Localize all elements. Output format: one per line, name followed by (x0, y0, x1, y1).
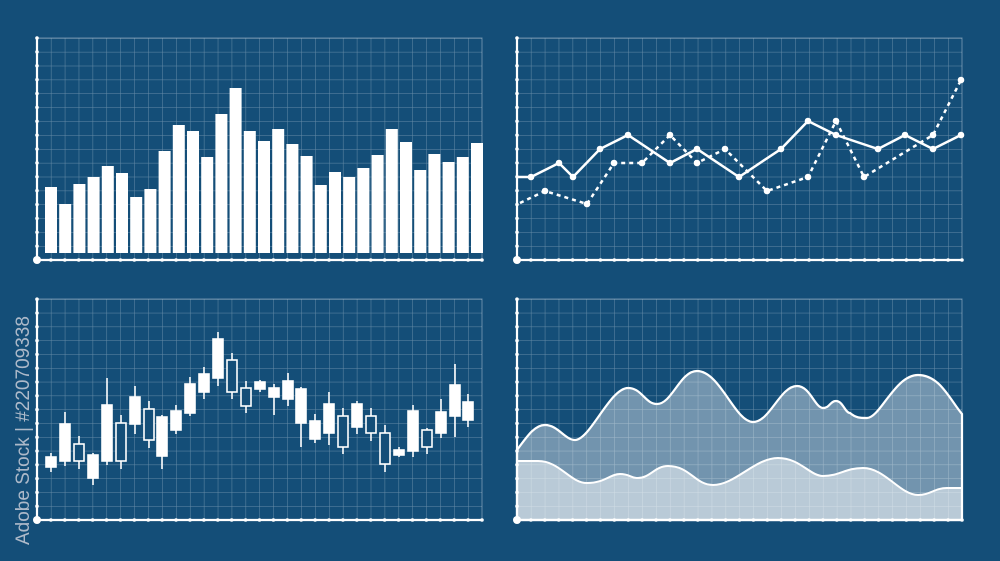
watermark id text: Adobe Stock | #220709338 (13, 316, 34, 545)
panel: bar chart (33, 37, 483, 264)
axes (37, 38, 482, 260)
panel: area chart (513, 298, 963, 524)
dotted line series (520, 77, 964, 207)
panel: line chart (513, 37, 964, 264)
lower area (517, 458, 962, 520)
bars (45, 88, 483, 253)
solid line series (517, 118, 964, 180)
candles (46, 332, 473, 485)
upper area (517, 371, 962, 520)
panel: candlestick chart (33, 298, 483, 524)
